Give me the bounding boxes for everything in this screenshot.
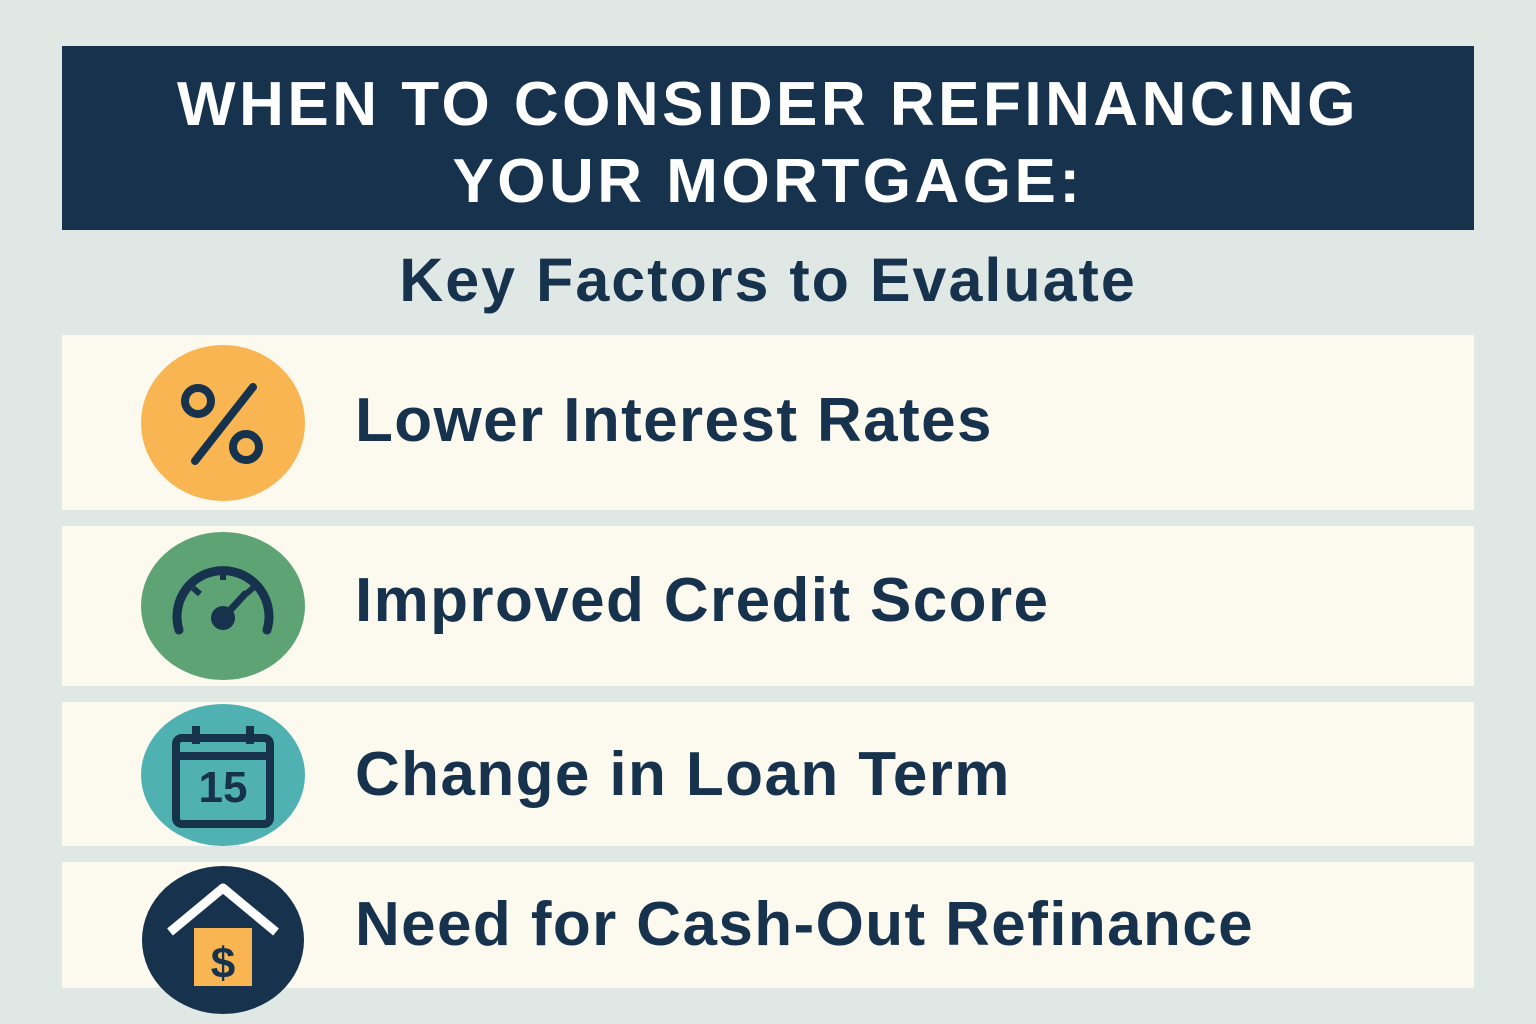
- label: lower interest rates: Lower Interest Rates: [355, 386, 993, 455]
- row: cash-out: [62, 862, 1474, 988]
- row: loan term: [62, 702, 1474, 846]
- row: credit score: [62, 526, 1474, 686]
- row: lower interest rates: [62, 335, 1474, 510]
- title: WHEN TO CONSIDER REFINANCING: [177, 70, 1359, 139]
- icon: calendar: [141, 704, 305, 846]
- title: YOUR MORTGAGE:: [452, 147, 1084, 216]
- label: cash-out: Need for Cash-Out Refinance: [355, 890, 1254, 959]
- icon: house dollar: [142, 866, 304, 1014]
- icon: calendar: 15: [199, 763, 247, 812]
- icon: house dollar: $: [211, 939, 235, 988]
- label: loan term: Change in Loan Term: [355, 740, 1011, 809]
- icon: gauge: [141, 532, 305, 680]
- label: credit score: Improved Credit Score: [355, 566, 1049, 635]
- title: [62, 46, 1474, 230]
- subtitle: Key Factors to Evaluate: [399, 246, 1137, 314]
- icon: percent: [141, 345, 305, 501]
